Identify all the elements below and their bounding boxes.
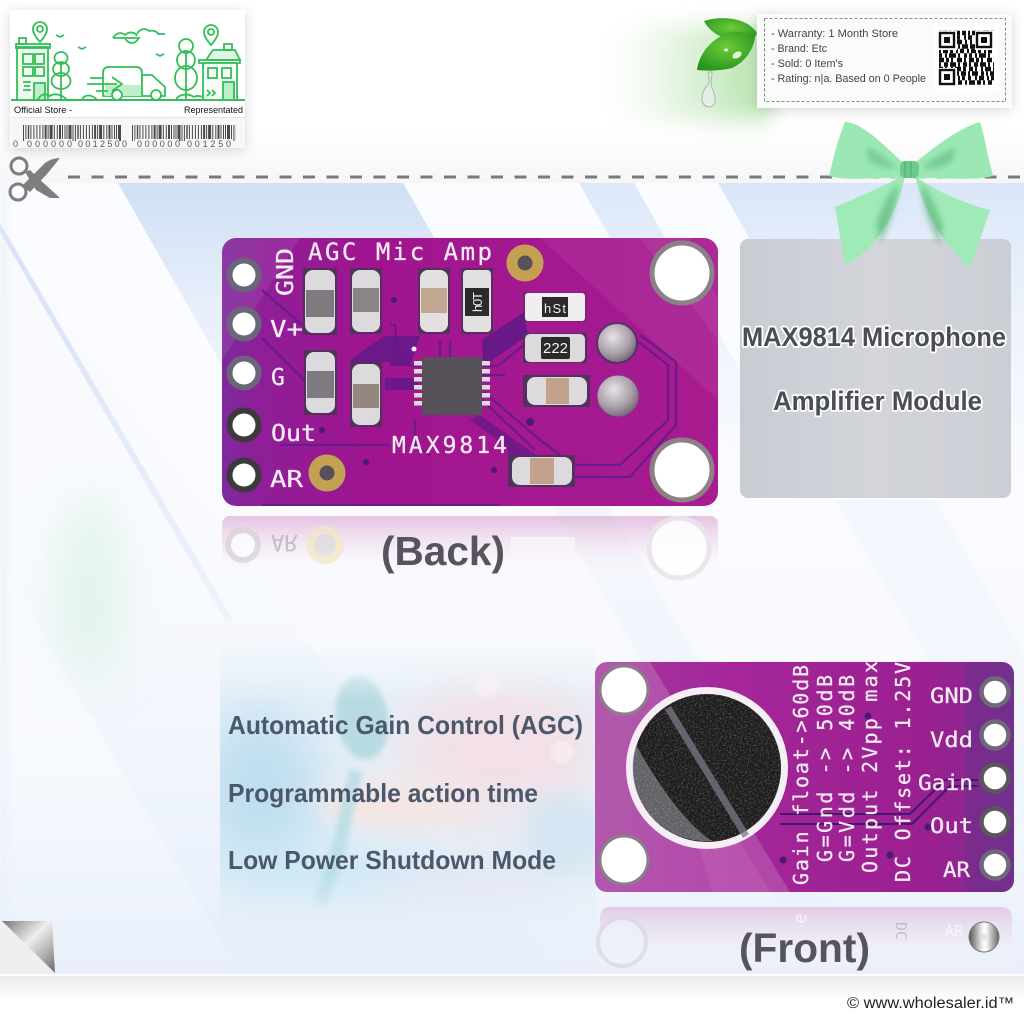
info card	[757, 14, 1012, 108]
pin labels: GND	[930, 684, 973, 708]
pin labels: Out	[930, 814, 973, 838]
dashed cut line	[68, 176, 1024, 178]
SMD resistors with markings: 222	[543, 340, 568, 357]
barcode: 000000	[137, 139, 180, 149]
pin labels: AR	[943, 858, 970, 882]
copyright: © www.wholesaler.id™	[847, 995, 1014, 1012]
silkscreen labels	[270, 238, 507, 493]
back PCB photo	[222, 238, 718, 506]
silkscreen gain table: G=Vdd -> 40dB	[835, 675, 859, 862]
caption: Front: (Front)	[739, 925, 870, 971]
mounting holes	[600, 666, 648, 884]
info text: - Brand: Etc	[771, 43, 827, 55]
silkscreen gain table: DC Offset: 1.25V	[891, 662, 915, 882]
IC chip	[414, 357, 490, 415]
barcode	[13, 133, 236, 149]
front board reflection	[598, 907, 1012, 969]
caption: Back: (Back)	[381, 528, 505, 574]
SMD resistors with markings	[461, 268, 587, 363]
front board reflection: DC	[892, 922, 910, 940]
silkscreen gain table: Gain float->60dB	[789, 665, 813, 885]
vias	[780, 712, 932, 864]
feature text list: Low Power Shutdown Mode	[228, 845, 556, 875]
copper traces and pour	[262, 290, 676, 505]
front board reflection: e	[790, 913, 811, 924]
icon: scissors	[10, 158, 60, 200]
back board reflection	[222, 516, 718, 578]
info text: - Warranty: 1 Month Store	[771, 28, 898, 40]
icon: metal ball	[969, 922, 999, 952]
feature text list: Programmable action time	[228, 778, 538, 808]
green glow behind leaves	[585, 26, 770, 120]
front PCB photo	[595, 661, 1014, 892]
silkscreen labels: MAX9814	[392, 433, 507, 459]
panel: features with blurred microphone photo	[220, 662, 596, 912]
traces	[780, 780, 978, 824]
barcode: 0	[13, 139, 18, 149]
light reflection streaks	[595, 662, 790, 892]
pin labels	[918, 684, 973, 882]
feature text list	[228, 710, 583, 875]
back board reflection: AR	[271, 529, 298, 554]
info text: - Rating: n|a. Based on 0 People	[771, 73, 926, 85]
header pads	[982, 678, 1008, 878]
silkscreen labels: V+	[270, 317, 303, 343]
electret microphone capsule	[626, 687, 788, 849]
icon: green leaves with water drop	[697, 18, 757, 107]
info text	[771, 28, 926, 85]
pin labels: Vdd	[930, 728, 973, 752]
title line 1: MAX9814 Microphone	[742, 322, 1006, 352]
light reflection streaks	[540, 238, 718, 400]
silkscreen labels: AR	[270, 467, 303, 493]
store text row	[11, 105, 245, 148]
header pads	[230, 260, 258, 490]
microphone solder joints	[597, 323, 639, 417]
icon: folded page corner	[2, 921, 55, 973]
SMD resistors with markings: hSt	[544, 301, 566, 316]
store text row: Official Store -	[14, 105, 72, 116]
barcode: 001250	[187, 139, 231, 149]
footer shading	[0, 976, 1024, 1002]
silkscreen gain table	[789, 661, 915, 885]
illustration: city delivery scene	[11, 22, 245, 100]
feature text list: Automatic Gain Control (AGC)	[228, 710, 583, 740]
background panel with diagonal light bands	[0, 183, 1024, 974]
silkscreen labels: G	[271, 365, 285, 391]
title line 2: Amplifier Module	[773, 386, 982, 416]
silkscreen labels: GND	[273, 248, 299, 296]
SMD capacitors, horizontal	[508, 375, 590, 487]
barcode: 0012500	[78, 139, 127, 149]
panel: title	[740, 239, 1011, 498]
store card	[10, 10, 245, 149]
silkscreen labels: Out	[271, 421, 316, 447]
icon: green ribbon bow	[829, 122, 993, 268]
front board reflection: AR	[945, 922, 964, 940]
QR code	[934, 27, 998, 92]
bottom edge line	[0, 974, 1024, 976]
vias	[319, 297, 534, 473]
info text: - Sold: 0 Item's	[771, 58, 843, 70]
top shading strip	[0, 130, 1024, 183]
gold vias	[314, 250, 538, 486]
mounting holes	[652, 243, 712, 500]
silkscreen gain table: G=Gnd -> 50dB	[813, 675, 837, 862]
silkscreen labels: AGC Mic Amp	[308, 238, 492, 266]
SMD resistors with markings: h0T	[470, 292, 485, 312]
silkscreen gain table: Output 2Vpp max	[858, 661, 882, 873]
pin labels: Gain	[918, 771, 973, 795]
store text row: Representated	[184, 105, 243, 116]
barcode: 000000	[27, 139, 72, 149]
SMD capacitors, vertical	[303, 268, 450, 427]
